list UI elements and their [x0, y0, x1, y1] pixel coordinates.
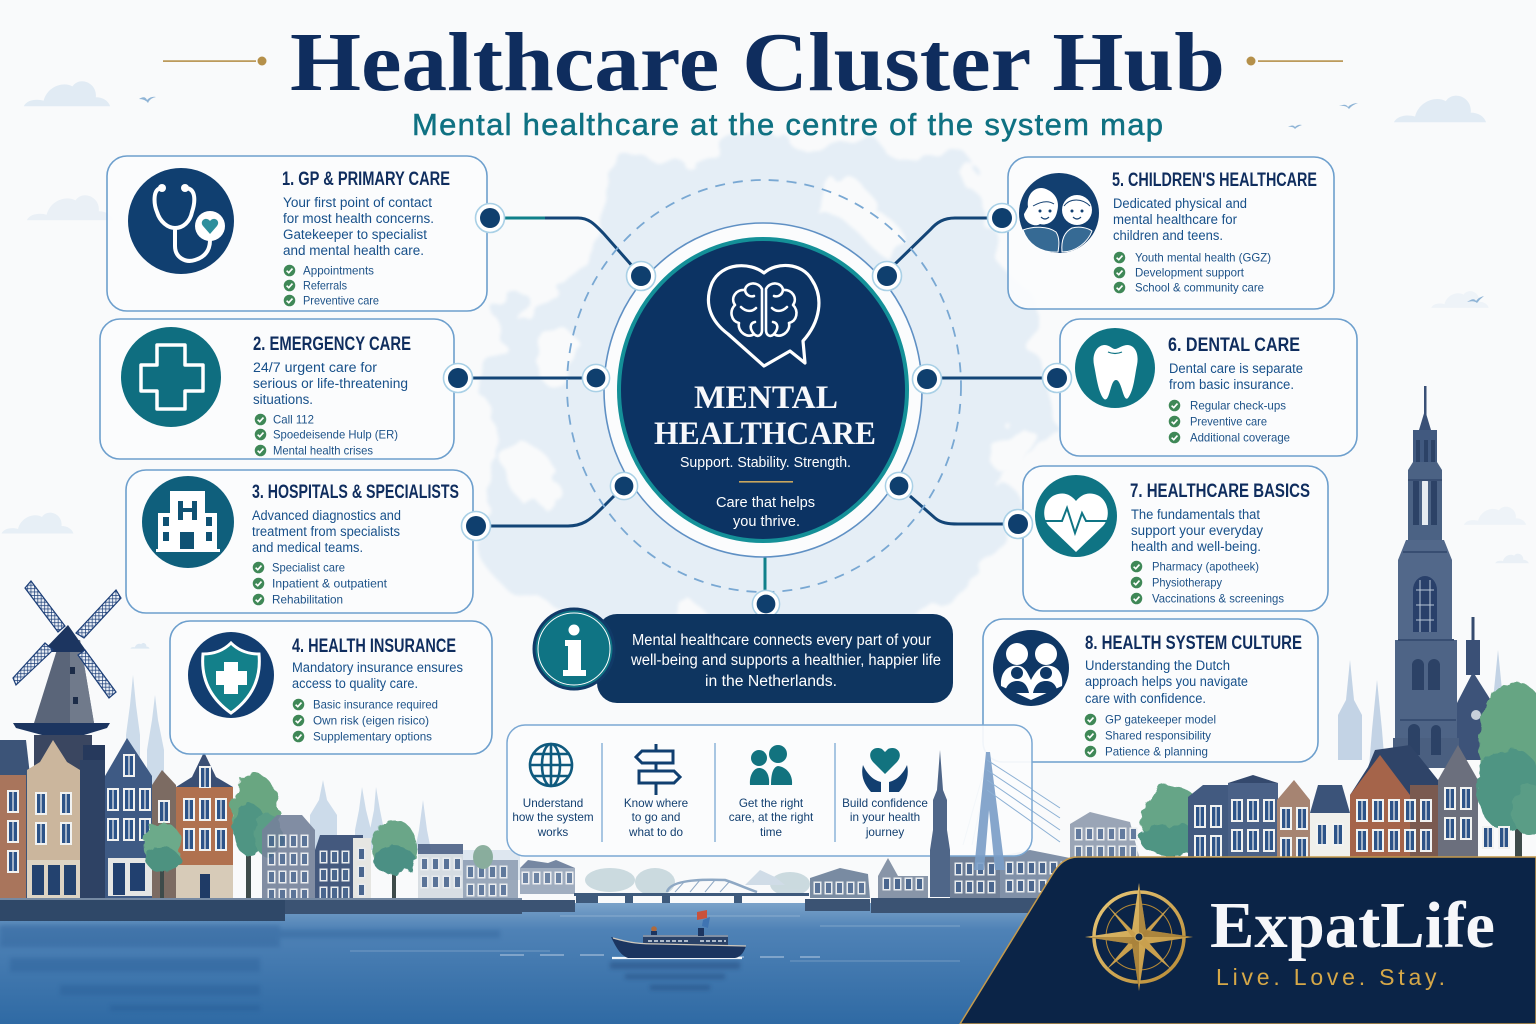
- panel: 7 Healthcare basics: [1023, 466, 1328, 611]
- heading: 8. HEALTH SYSTEM CULTURE: [1085, 633, 1302, 654]
- checklist: Appointments: [303, 264, 374, 278]
- benefit text: [512, 797, 594, 839]
- checklist: [1169, 398, 1290, 444]
- description: access to quality care.: [292, 676, 418, 691]
- checklist: [1131, 560, 1284, 606]
- hub title: HEALTHCARE: [654, 416, 876, 452]
- checklist: Mental health crises: [273, 444, 373, 458]
- tree: [231, 774, 282, 900]
- panel: 6 Dental care: [1060, 319, 1357, 456]
- heading: 2. EMERGENCY CARE: [253, 334, 411, 355]
- hub tagline: [680, 454, 851, 530]
- checklist: Youth mental health (GGZ): [1135, 250, 1271, 264]
- callout: connects every part: [534, 609, 953, 703]
- icon: heart with pulse: [1035, 475, 1117, 557]
- checklist: Referrals: [303, 278, 347, 292]
- checklist: [293, 698, 438, 744]
- checklist: Shared responsibility: [1105, 728, 1211, 742]
- logo panel: ExpatLife: [960, 857, 1536, 1024]
- connector lines: [472, 218, 1046, 592]
- checklist: Development support: [1135, 266, 1245, 280]
- description: for most health concerns.: [283, 211, 434, 226]
- icon: shield: [188, 632, 274, 718]
- tree: [371, 820, 417, 900]
- checklist: Vaccinations & screenings: [1152, 592, 1284, 606]
- callout text: Mental healthcare connects every part of your: [632, 632, 931, 649]
- icon: brain in heart speech bubble: [708, 265, 819, 366]
- checklist: Regular check-ups: [1190, 398, 1286, 412]
- benefit text: Understand: [523, 797, 583, 810]
- hub title: MENTAL: [694, 380, 838, 416]
- description: Advanced diagnostics and: [252, 508, 401, 523]
- description: support your everyday: [1131, 523, 1263, 538]
- description: Dental care is separate: [1169, 361, 1303, 376]
- central hub: Mental Healthcare: [604, 223, 922, 557]
- callout text: in the Netherlands.: [705, 673, 837, 690]
- boat: [500, 910, 820, 990]
- icon: hands holding heart: [862, 748, 908, 792]
- description: serious or life-threatening: [253, 376, 408, 391]
- benefit text: what to do: [628, 826, 683, 839]
- benefit text: journey: [865, 826, 904, 839]
- title ornaments: [163, 56, 1343, 66]
- panel: 4 Health insurance: [170, 621, 492, 754]
- canal houses left: [0, 740, 30, 900]
- description: approach helps you navigate: [1085, 674, 1248, 689]
- hub title: [654, 380, 876, 452]
- icon: compass rose: [1085, 883, 1193, 991]
- skyline foreground over panel: [930, 750, 1032, 897]
- heading: 5. CHILDREN'S HEALTHCARE: [1112, 170, 1317, 191]
- benefit text: care, at the right: [729, 811, 814, 824]
- description: care with confidence.: [1085, 691, 1206, 706]
- description: treatment from specialists: [252, 524, 400, 539]
- description: [283, 195, 434, 258]
- description: Gatekeeper to specialist: [283, 227, 427, 242]
- description: health and well-being.: [1131, 539, 1261, 554]
- title: Healthcare Cluster Hub: [290, 16, 1225, 109]
- dashed orbit: [567, 180, 961, 592]
- checklist: Supplementary options: [313, 730, 432, 744]
- description: Dedicated physical and: [1113, 196, 1247, 211]
- checklist: Call 112: [273, 412, 314, 426]
- checklist: [253, 560, 388, 606]
- hub tagline: Care that helps: [716, 494, 815, 511]
- panel: 2 Emergency care: [100, 319, 454, 459]
- checklist: Inpatient & outpatient: [272, 576, 388, 590]
- connector nodes: [582, 262, 942, 618]
- panel: 5 Children's healthcare: [1008, 157, 1334, 309]
- Erasmus bridge: [963, 760, 1060, 845]
- Dom tower: [1393, 386, 1459, 768]
- description: [1131, 507, 1263, 554]
- skyline centre and bridge: [505, 860, 810, 912]
- heading: 7. HEALTHCARE BASICS: [1130, 481, 1310, 502]
- icon: people: [750, 745, 792, 785]
- church behind tower: [1442, 617, 1497, 760]
- skyline right of centre with bridge: [805, 750, 1070, 913]
- Netherlands map watermark: [470, 143, 1046, 679]
- icon: medical cross: [121, 327, 221, 427]
- tree: [1140, 786, 1204, 860]
- water: [0, 898, 1536, 1024]
- benefit text: time: [760, 826, 782, 839]
- brand tagline: Live. Love. Stay.: [1216, 964, 1445, 990]
- checklist: Basic insurance required: [313, 698, 438, 712]
- heading: 3. HOSPITALS & SPECIALISTS: [252, 482, 459, 503]
- checklist: Rehabilitation: [272, 592, 343, 606]
- icon: tooth: [1075, 328, 1155, 408]
- checklist: Own risk (eigen risico): [313, 714, 429, 728]
- benefit text: works: [537, 826, 568, 839]
- description: Mandatory insurance ensures: [292, 660, 463, 675]
- icon: globe: [530, 744, 572, 786]
- checklist: Additional coverage: [1190, 430, 1290, 444]
- large tree right: [1477, 682, 1536, 860]
- checklist: Patience & planning: [1105, 744, 1208, 758]
- checklist: Physiotherapy: [1152, 576, 1222, 590]
- checklist: Preventive care: [1190, 414, 1267, 428]
- church spire: [930, 750, 950, 897]
- benefit text: how the system: [512, 811, 594, 824]
- heading: 4. HEALTH INSURANCE: [292, 636, 456, 657]
- benefit text: Get the right: [739, 797, 804, 810]
- panel: 3 Hospitals & specialists: [126, 470, 473, 613]
- distant spires left: [126, 675, 520, 880]
- benefit text: Build confidence: [842, 797, 928, 810]
- description: Understanding the Dutch: [1085, 658, 1230, 673]
- checklist: GP gatekeeper model: [1105, 712, 1216, 726]
- checklist: [255, 412, 398, 458]
- description: Your first point of contact: [283, 195, 432, 210]
- icon: stethoscope: [128, 168, 234, 274]
- checklist: Pharmacy (apotheek): [1152, 560, 1259, 574]
- icon: info: [534, 609, 614, 689]
- callout text: well-being and supports a healthier, happier life: [630, 652, 941, 669]
- description: mental healthcare for: [1113, 212, 1237, 227]
- description: [1085, 658, 1248, 706]
- windmill: [13, 581, 121, 775]
- checklist: School & community care: [1135, 280, 1264, 294]
- description: [253, 360, 408, 407]
- clouds and birds: [2, 81, 1529, 649]
- panel: 1 GP & primary care: [107, 156, 487, 311]
- quay centre right: [805, 898, 1043, 913]
- skyline right: [1070, 386, 1536, 868]
- icon: family group: [993, 630, 1069, 706]
- quay left: [0, 898, 522, 921]
- hub tagline: Support. Stability. Strength.: [680, 454, 851, 471]
- benefit text: in your health: [850, 811, 920, 824]
- brand name: ExpatLife: [1210, 889, 1495, 962]
- checklist: Preventive care: [303, 294, 379, 308]
- hub tagline: you thrive.: [733, 513, 800, 530]
- checklist: [1085, 712, 1216, 758]
- benefit text: [729, 797, 814, 839]
- icon: hospital building: [142, 476, 234, 568]
- heading: 6. DENTAL CARE: [1168, 335, 1300, 356]
- outer connector nodes: [444, 204, 1072, 540]
- checklist: [1114, 250, 1271, 294]
- heading: 1. GP & PRIMARY CARE: [282, 169, 450, 190]
- description: situations.: [253, 392, 313, 407]
- description: [292, 660, 463, 691]
- checklist: Specialist care: [272, 560, 345, 574]
- description: [1113, 196, 1247, 243]
- benefit text: Know where: [624, 797, 688, 810]
- tree: [144, 823, 182, 900]
- benefit text: to go and: [632, 811, 680, 824]
- description: children and teens.: [1113, 228, 1223, 243]
- description: and mental health care.: [283, 243, 424, 258]
- icon: two children: [1019, 173, 1099, 253]
- description: The fundamentals that: [1131, 507, 1260, 522]
- panel: 8 Health system culture: [983, 619, 1318, 762]
- description: 24/7 urgent care for: [253, 360, 378, 375]
- icon: signpost: [636, 744, 680, 795]
- subtitle: Mental healthcare at the centre of the system map: [412, 107, 1163, 142]
- checklist: [284, 264, 379, 308]
- benefit text: [624, 797, 688, 839]
- description: [252, 508, 401, 555]
- description: from basic insurance.: [1169, 377, 1294, 392]
- panel: four benefits: [507, 725, 1032, 856]
- callout text: [630, 632, 941, 690]
- description: [1169, 361, 1303, 392]
- checklist: Spoedeisende Hulp (ER): [273, 428, 398, 442]
- description: and medical teams.: [252, 540, 363, 555]
- benefit text: [842, 797, 928, 839]
- skyline left: [0, 581, 522, 921]
